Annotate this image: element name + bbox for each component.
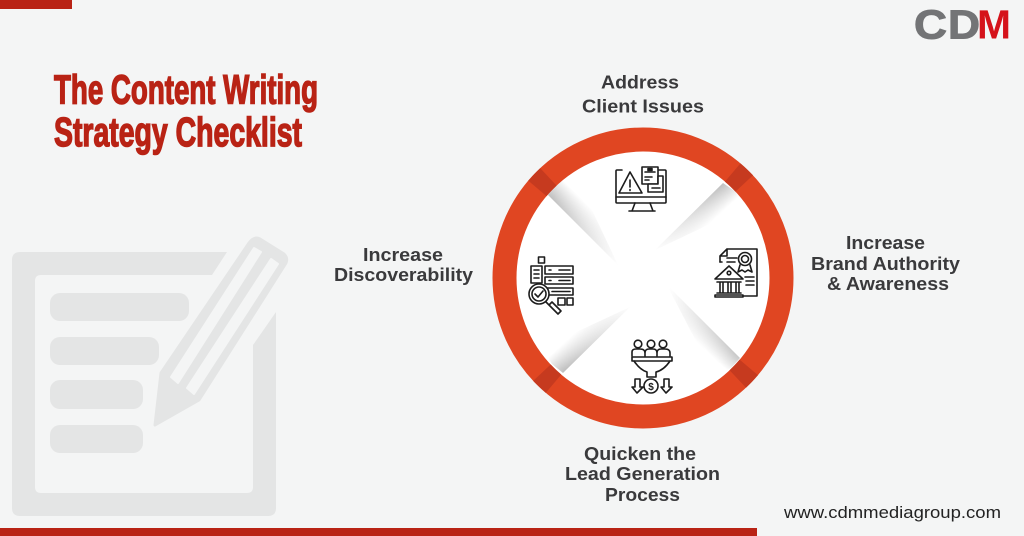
logo: CDM: D xyxy=(948,2,980,48)
label: increase brand authority and awareness: Increase xyxy=(846,232,925,253)
website url: www.cdmmediagroup.com xyxy=(783,503,1001,522)
icon: leads funnel xyxy=(632,340,672,393)
bottom accent bar xyxy=(0,528,757,536)
label: increase brand authority and awareness: Brand Authority xyxy=(811,253,961,274)
label: address client issues xyxy=(582,72,704,116)
label: increase discoverability: Increase xyxy=(363,244,443,265)
label: address client issues: Address xyxy=(601,72,679,92)
label: increase discoverability xyxy=(334,244,474,285)
inner disc xyxy=(515,150,771,406)
label: quicken the lead generation process: Quicken the xyxy=(584,443,696,464)
label: increase discoverability: Discoverability xyxy=(334,264,474,285)
label: quicken the lead generation process: Lead Generation xyxy=(565,463,720,484)
icon: search and data xyxy=(529,257,573,314)
watermark: document and pencil icon xyxy=(12,238,287,516)
label: increase brand authority and awareness xyxy=(811,232,961,294)
icon: leads funnel: $ xyxy=(648,382,654,393)
label: increase brand authority and awareness: & Awareness xyxy=(827,273,949,294)
logo: CDM: C xyxy=(914,2,947,48)
icon: certificate and bank xyxy=(715,249,757,297)
ring dark bands xyxy=(448,83,838,473)
ring xyxy=(504,140,782,416)
label: address client issues: Client Issues xyxy=(582,96,704,116)
label: quicken the lead generation process xyxy=(565,443,720,505)
circular diagram xyxy=(492,128,794,428)
title xyxy=(54,66,318,155)
logo: CDM xyxy=(914,2,1011,48)
top left accent bar xyxy=(0,0,72,9)
shaded dividers xyxy=(548,182,740,373)
logo: CDM: M xyxy=(977,2,1011,48)
icon: monitor with warning xyxy=(616,167,666,211)
title: Strategy Checklist xyxy=(54,109,302,155)
title: The Content Writing xyxy=(54,66,318,112)
label: quicken the lead generation process: Process xyxy=(605,484,680,505)
